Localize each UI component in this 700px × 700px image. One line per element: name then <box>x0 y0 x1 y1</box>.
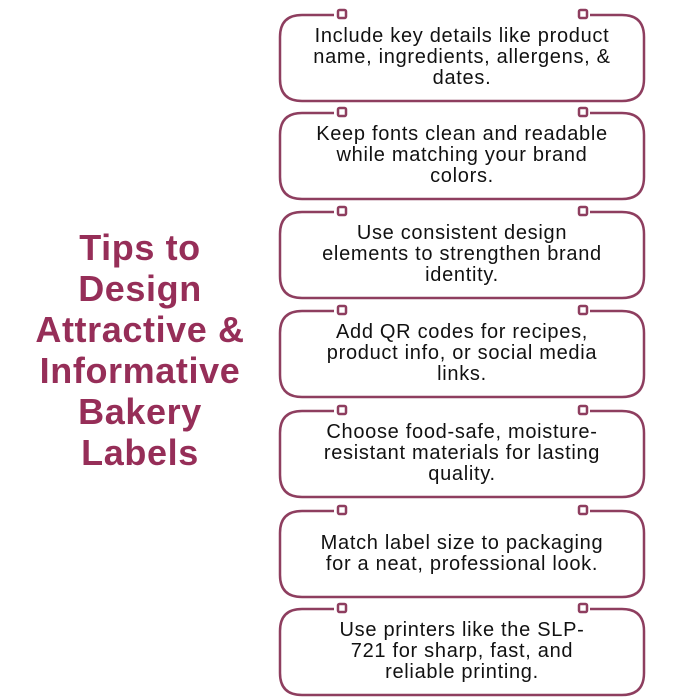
text: tip 5 <box>324 421 600 485</box>
text: tip 5: quality. <box>428 463 496 485</box>
panel: tip 4 <box>278 304 646 398</box>
text: tip 7: 721 for sharp, fast, and <box>351 640 573 662</box>
text: tip 3: Use consistent design <box>357 222 567 244</box>
text: tip 6 <box>321 532 603 574</box>
title: Tips to <box>79 227 201 268</box>
text: tip 2: while matching your brand <box>337 144 587 166</box>
text: tip 4: Add QR codes for recipes, <box>336 321 588 343</box>
text: tip 7: Use printers like the SLP- <box>340 619 584 641</box>
panel: tip 1 <box>278 8 646 102</box>
text: tip 2 <box>316 123 608 187</box>
text: tip 3: elements to strengthen brand <box>322 243 602 265</box>
text: tip 1: name, ingredients, allergens, & <box>313 46 611 68</box>
text: tip 1: Include key details like product <box>315 25 609 47</box>
title: Bakery <box>78 391 202 432</box>
text: tip 2: colors. <box>430 165 494 187</box>
title: Design <box>78 268 202 309</box>
title: Informative <box>40 350 240 391</box>
title <box>35 227 245 473</box>
text: tip 6: for a neat, professional look. <box>326 552 598 574</box>
text: tip 6: Match label size to packaging <box>321 532 603 554</box>
text: tip 5: Choose food-safe, moisture- <box>326 421 598 443</box>
text: tip 1 <box>313 25 611 89</box>
text: tip 3: identity. <box>425 264 499 286</box>
text: tip 1: dates. <box>433 67 491 89</box>
panel: tip 7 <box>278 602 646 696</box>
title: Attractive & <box>35 309 245 350</box>
text: tip 3 <box>322 222 602 286</box>
text: tip 5: resistant materials for lasting <box>324 442 600 464</box>
text: tip 2: Keep fonts clean and readable <box>316 123 608 145</box>
title: Labels <box>81 432 199 473</box>
panel: tip 2 <box>278 106 646 200</box>
panel: tip 3 <box>278 206 646 300</box>
text: tip 4: product info, or social media <box>327 342 597 364</box>
text: tip 4: links. <box>437 363 487 385</box>
panel: tip 5 <box>278 404 646 498</box>
text: tip 7: reliable printing. <box>385 661 539 683</box>
text: tip 7 <box>340 619 584 683</box>
panel: tip 6 <box>278 504 646 598</box>
text: tip 4 <box>327 321 597 385</box>
